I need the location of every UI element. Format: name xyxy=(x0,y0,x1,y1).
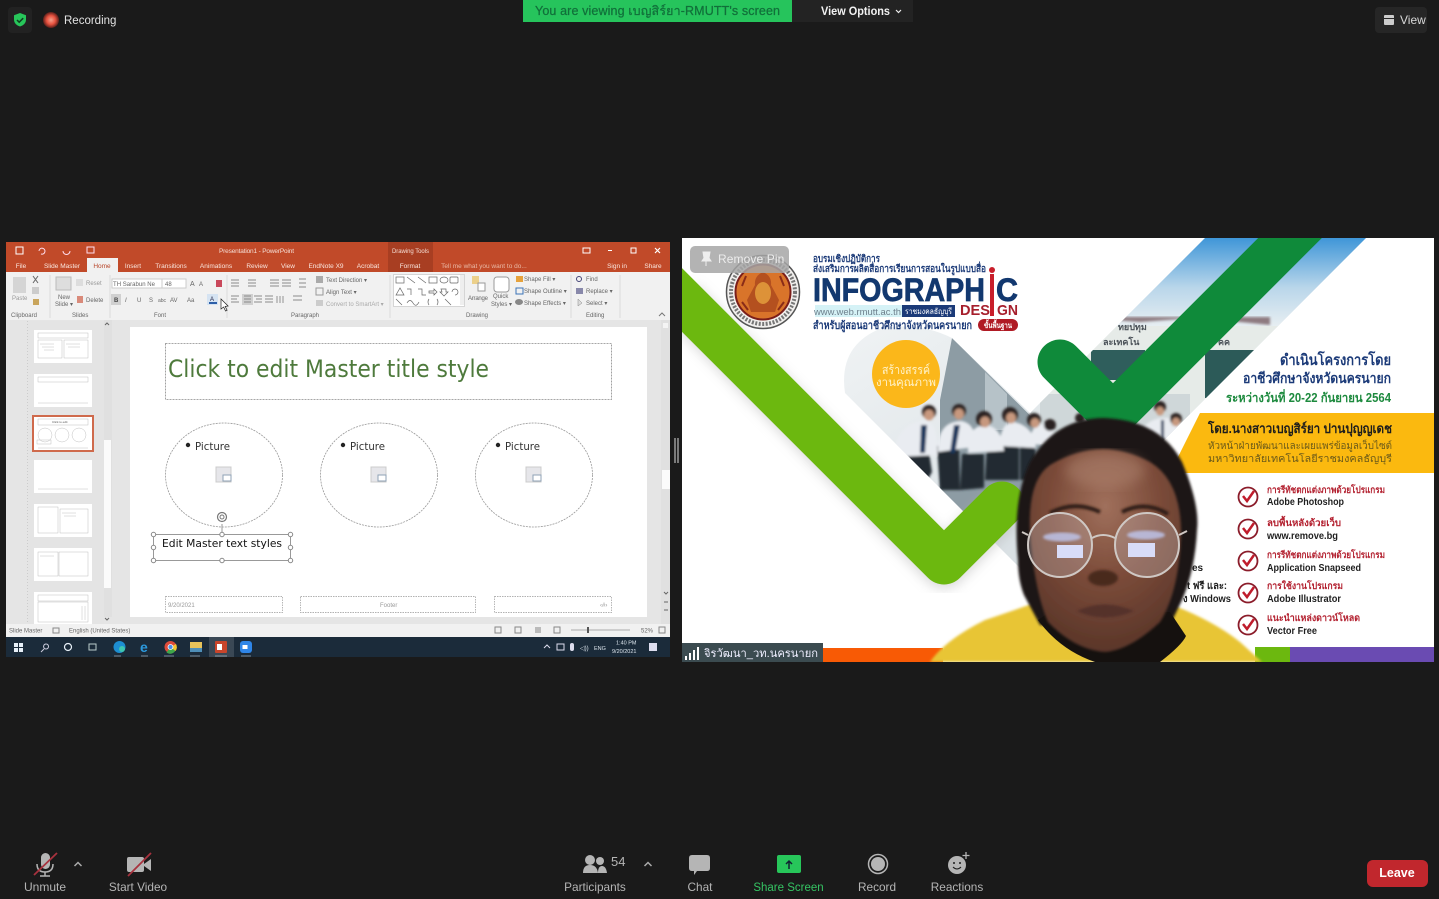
right scrollbar xyxy=(661,320,670,624)
ribbon toolbar: S xyxy=(149,298,153,304)
slide canvas xyxy=(130,327,647,617)
ribbon toolbar: U xyxy=(137,298,141,304)
system tray xyxy=(544,640,657,655)
ribbon toolbar: abc xyxy=(158,298,167,304)
participant name tag: จิรวัฒนา_วท.นครนายก xyxy=(703,648,818,660)
ribbon tabs: Transitions xyxy=(155,263,188,270)
ribbon toolbar: Styles ▾ xyxy=(491,302,512,308)
remove pin button xyxy=(690,246,789,273)
record button xyxy=(858,854,896,894)
unmute button: Unmute xyxy=(24,880,66,894)
selected text box xyxy=(151,512,293,563)
headline INFOGRAPHIC xyxy=(814,278,1018,302)
dark green check mark xyxy=(1060,198,1330,415)
ribbon toolbar: Shape Outline ▾ xyxy=(524,289,567,295)
bottom meeting toolbar xyxy=(24,852,1428,894)
course topics list: Vector Free xyxy=(1267,626,1317,637)
poster title block xyxy=(813,253,1018,333)
ribbon toolbar: Reset xyxy=(86,281,102,287)
ribbon toolbar: Convert to SmartArt ▾ xyxy=(326,302,384,308)
ribbon tabs: Animations xyxy=(200,263,233,270)
ribbon toolbar: Shape Fill ▾ xyxy=(524,277,555,283)
course topics list xyxy=(1183,484,1385,637)
ribbon toolbar: A xyxy=(210,297,214,303)
ribbon tabs: View xyxy=(281,263,295,270)
poster title block: GN xyxy=(997,302,1018,319)
PowerPoint title bar xyxy=(6,242,670,272)
top bar: meeting status xyxy=(8,0,1427,33)
chat button xyxy=(688,855,713,894)
ribbon tabs: Insert xyxy=(125,263,141,270)
headline INFOGRAPHIC: C xyxy=(996,272,1018,308)
instructor yellow box: โดย.นางสาวเบญสิร์ยา ปานปุญญเดช xyxy=(1207,420,1392,437)
ribbon toolbar: A xyxy=(199,282,203,288)
ribbon toolbar: AV xyxy=(170,298,178,304)
presenter xyxy=(930,418,1262,662)
footer placeholders: 9/20/2021 xyxy=(168,603,195,609)
title placeholder xyxy=(166,344,612,400)
poster title block: สำหรับผู้สอนอาชีวศึกษาจังหวัดนครนายก xyxy=(813,319,972,333)
black mask strap xyxy=(1038,612,1186,662)
ribbon toolbar: Shape Effects ▾ xyxy=(524,301,566,307)
ribbon toolbar: New xyxy=(58,295,71,301)
chat button: Chat xyxy=(688,880,713,894)
ribbon toolbar: Paragraph xyxy=(291,313,319,319)
start video button xyxy=(109,853,168,894)
footer placeholders xyxy=(166,596,612,612)
icon: start button xyxy=(14,643,23,652)
share screen button: Share Screen xyxy=(753,882,824,894)
panel: shared PowerPoint screen xyxy=(6,242,670,657)
ribbon toolbar: Delete xyxy=(86,298,104,304)
ribbon toolbar: Replace ▾ xyxy=(586,289,613,295)
organiser text: อาชีวศึกษาจังหวัดนครนายก xyxy=(1243,370,1391,386)
ribbon tabs: Acrobat xyxy=(357,263,379,270)
poster photo xyxy=(844,238,1366,566)
poster title block: www.web.rmutt.ac.th xyxy=(813,307,901,318)
ribbon tabs: EndNote X9 xyxy=(308,263,344,270)
recording indicator xyxy=(43,12,116,28)
face xyxy=(1030,449,1181,652)
leave button: Leave xyxy=(1379,866,1415,880)
status bar xyxy=(6,624,670,637)
hair xyxy=(1016,418,1197,625)
logo seal xyxy=(726,256,800,328)
lime check mark xyxy=(660,278,1002,562)
view options button: View Options xyxy=(821,6,890,18)
status bar: 52% xyxy=(641,628,654,634)
course topics list: ลบพื้นหลังด้วยเว็บ xyxy=(1267,515,1341,529)
poster photo: คค xyxy=(1218,337,1230,347)
poster photo: ละเทคโน xyxy=(1103,336,1140,347)
course topics list: ง Windows xyxy=(1183,594,1231,605)
yellow badge: งานคุณภาพ xyxy=(876,377,936,389)
ruler guide of slide pane xyxy=(27,321,29,624)
course topics list: การใช้งานโปรแกรม xyxy=(1267,580,1343,592)
banner: viewing screen xyxy=(523,0,792,22)
participants button: 54 xyxy=(611,854,625,869)
system tray: 1:40 PM xyxy=(616,640,637,646)
unmute button xyxy=(24,853,66,894)
recording indicator: Recording xyxy=(64,15,116,27)
system tray: ENG xyxy=(594,646,606,652)
bottom colour stripe xyxy=(823,647,1434,662)
status bar: English (United States) xyxy=(69,628,130,634)
shadow under lime check xyxy=(680,300,1002,566)
system tray: ◁)) xyxy=(580,646,589,652)
picture placeholder 1 xyxy=(166,423,282,527)
ribbon toolbar: I xyxy=(125,298,127,304)
panel: video of presenter over course poster xyxy=(682,238,1434,662)
ribbon tabs xyxy=(16,258,662,272)
share screen button xyxy=(753,855,824,894)
system tray: 9/20/2021 xyxy=(612,649,636,655)
yellow shirt xyxy=(930,602,1262,662)
ribbon toolbar: Aa xyxy=(187,298,195,304)
ribbon toolbar: TH Sarabun Ne xyxy=(113,282,156,288)
participants button: Participants xyxy=(564,880,626,894)
course topics list: แนะนำแหล่งดาวน์โหลด xyxy=(1267,612,1360,624)
PowerPoint title bar: Drawing Tools xyxy=(392,249,429,255)
poster title block: ขั้นพื้นฐาน xyxy=(984,319,1012,331)
ribbon toolbar: 48 xyxy=(165,282,172,288)
ribbon tabs: Home xyxy=(93,263,111,270)
poster title block: ส่งเสริมการผลิตสื่อการเรียนการสอนในรูปแบบสื่อ xyxy=(813,261,986,276)
course topics list: t ฟรี และ: xyxy=(1187,580,1227,592)
ribbon toolbar: Select ▾ xyxy=(586,301,607,307)
picture placeholder 2 xyxy=(320,423,438,527)
students group xyxy=(895,401,1182,490)
start video button: Start Video xyxy=(109,880,168,894)
splitter handle xyxy=(674,438,678,463)
poster title block: ราชมงคลธัญบุรี xyxy=(905,307,953,316)
PowerPoint title bar: Presentation1 - PowerPoint xyxy=(219,248,294,255)
course topics list: การรีทัชตกแต่งภาพด้วยโปรแกรม xyxy=(1267,484,1385,496)
slide thumbnails pane: Click to edit xyxy=(52,420,68,424)
poster title block: DES xyxy=(960,302,990,319)
ribbon toolbar: Editing xyxy=(586,313,604,319)
course topics list: Adobe Illustrator xyxy=(1267,594,1341,605)
reactions button: Reactions xyxy=(931,880,983,894)
ribbon tabs: Review xyxy=(246,263,268,270)
instructor yellow box: หัวหน้าฝ่ายพัฒนาและเผยแพร่ข้อมูลเว็บไซต์ xyxy=(1208,438,1392,452)
instructor yellow box: มหาวิทยาลัยเทคโนโลยีราชมงคลธัญบุรี xyxy=(1208,452,1393,465)
remove pin button: Remove Pin xyxy=(718,252,784,266)
ribbon toolbar xyxy=(6,272,670,320)
course topics list: การรีทัชตกแต่งภาพด้วยโปรแกรม xyxy=(1267,549,1385,561)
instructor yellow box xyxy=(1170,413,1434,473)
view button xyxy=(1375,7,1427,33)
icon: security shield xyxy=(8,7,32,33)
course topics list: Application Snapseed xyxy=(1267,563,1361,574)
ribbon toolbar: B xyxy=(114,298,119,304)
ribbon toolbar: Clipboard xyxy=(11,313,37,319)
ribbon toolbar: Find xyxy=(586,277,598,283)
ribbon toolbar: A xyxy=(190,281,195,288)
Windows taskbar xyxy=(6,637,670,657)
poster title block: อบรมเชิงปฏิบัติการ xyxy=(813,253,881,265)
ribbon toolbar: Slide ▾ xyxy=(55,302,73,308)
ribbon toolbar: Drawing xyxy=(466,313,488,319)
picture placeholder 3 xyxy=(476,423,592,527)
Windows taskbar: e xyxy=(140,639,148,655)
organiser text: ระหว่างวันที่ 20-22 กันยายน 2564 xyxy=(1226,389,1391,405)
ribbon tabs: Share xyxy=(644,263,662,270)
picture placeholder 3: Picture xyxy=(505,440,540,453)
headline INFOGRAPHIC: INFOGRAPH xyxy=(813,272,985,308)
mute options caret xyxy=(74,862,82,866)
footer placeholders: ‹#› xyxy=(600,603,607,609)
ribbon tabs: Format xyxy=(400,263,420,270)
leave button xyxy=(1367,860,1428,887)
picture placeholder 2: Picture xyxy=(350,440,385,453)
glasses xyxy=(1022,513,1187,577)
thumbnail scrollbar xyxy=(104,320,112,620)
participant name tag xyxy=(682,643,823,662)
ribbon tabs: Tell me what you want to do... xyxy=(441,263,527,270)
selected text box: Edit Master text styles xyxy=(162,537,282,550)
ribbon tabs: Slide Master xyxy=(44,263,81,270)
brows, nose and lips xyxy=(1050,506,1168,618)
ribbon toolbar: Font xyxy=(154,313,166,319)
ribbon tabs: File xyxy=(16,263,27,270)
ribbon toolbar: Arrange xyxy=(468,296,489,302)
footer placeholders: Footer xyxy=(380,603,397,609)
participants caret xyxy=(644,862,652,866)
organiser text: ดำเนินโครงการโดย xyxy=(1280,350,1391,369)
course topics list: es xyxy=(1192,563,1204,574)
slide thumbnails pane xyxy=(28,321,94,624)
title placeholder: Click to edit Master title style xyxy=(168,355,489,383)
picture placeholder 1: Picture xyxy=(195,440,230,453)
course topics list: Adobe Photoshop xyxy=(1267,497,1344,508)
reactions button xyxy=(931,852,983,894)
ribbon toolbar: Text Direction ▾ xyxy=(326,278,367,284)
organiser text xyxy=(1226,350,1391,405)
check icons xyxy=(1238,488,1258,634)
banner: viewing screen: You are viewing เบญสิร์ยา-RMUTT's screen xyxy=(535,4,780,18)
ribbon toolbar: Align Text ▾ xyxy=(326,290,357,296)
poster photo: ทยปทุม xyxy=(1118,322,1147,333)
ribbon tabs: Sign in xyxy=(607,263,627,270)
yellow badge: สร้างสรรค์ xyxy=(882,363,930,377)
course topics list: www.remove.bg xyxy=(1266,531,1338,542)
yellow badge xyxy=(872,340,940,408)
ribbon toolbar: Slides xyxy=(72,313,88,319)
record button: Record xyxy=(858,880,896,894)
status bar: Slide Master xyxy=(9,628,42,634)
participants button xyxy=(564,854,626,894)
view options button xyxy=(792,0,913,22)
view button: View xyxy=(1400,13,1426,27)
thumbnail xyxy=(33,330,93,625)
ribbon toolbar: Paste xyxy=(12,296,28,302)
ribbon toolbar: Quick xyxy=(493,294,509,300)
